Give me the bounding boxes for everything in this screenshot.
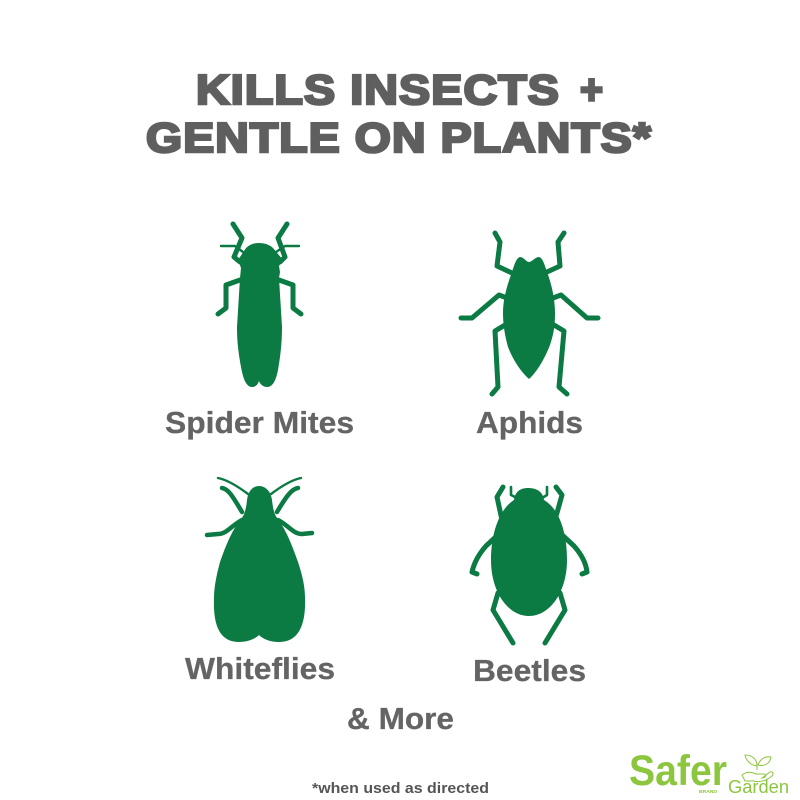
- title: KILLS INSECTS: [196, 66, 560, 113]
- label: and more: & More: [347, 701, 454, 736]
- logo: Safer Brand Garden: [629, 747, 789, 797]
- logo: Safer Brand Garden: Safer: [629, 747, 727, 795]
- icon: aphid: [461, 233, 598, 394]
- label: aphids: Aphids: [476, 405, 583, 440]
- logo: Safer Brand Garden: Garden: [728, 777, 789, 797]
- label: whiteflies: Whiteflies: [185, 651, 335, 686]
- logo: Safer Brand Garden: BRAND: [699, 789, 718, 794]
- title: GENTLE ON PLANTS*: [146, 114, 652, 161]
- footnote: *when used as directed: [312, 780, 489, 797]
- icon: sprout in hand: [742, 755, 773, 782]
- title: +: [580, 66, 604, 113]
- icon: spider mite: [218, 224, 301, 387]
- label: spider mites: Spider Mites: [165, 405, 354, 440]
- icon: beetle: [472, 487, 587, 643]
- icon: whitefly: [207, 478, 312, 642]
- title: [146, 66, 652, 161]
- label: beetles: Beetles: [473, 653, 586, 688]
